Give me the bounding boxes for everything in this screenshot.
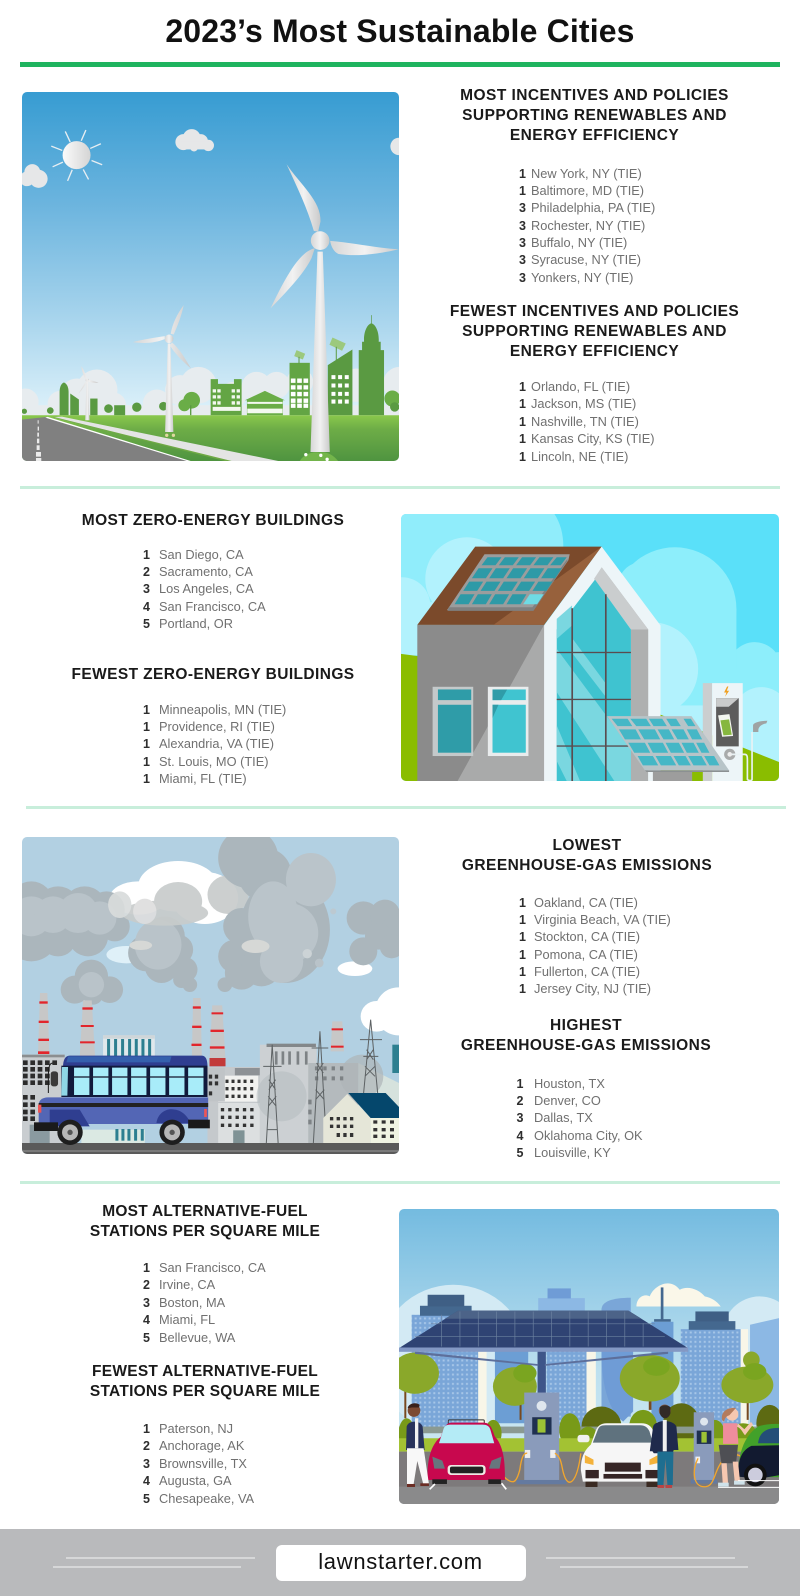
pale hills and clouds	[378, 1283, 796, 1435]
heading: most zero-energy buildings: MOST ZERO-ENERGY BUILDINGS	[82, 512, 344, 529]
heading: most incentives	[460, 87, 729, 144]
panel: renewables incentives: 3	[519, 271, 526, 285]
title: 2023’s Most Sustainable Cities	[165, 13, 635, 49]
smoke: right	[218, 828, 330, 992]
panel: renewables incentives: 1	[519, 415, 526, 429]
heading: fewest alternative-fuel stations: FEWEST ALTERNATIVE-FUEL	[92, 1363, 318, 1380]
panel: alternative-fuel stations: 3	[143, 1457, 150, 1471]
ranked list: fewest stations: Brownsville, TX	[159, 1456, 247, 1471]
heading: highest emissions: GREENHOUSE-GAS EMISSIONS	[461, 1037, 711, 1054]
smoke: far right	[347, 900, 415, 965]
house	[323, 1093, 399, 1145]
panel: zero-energy buildings: 5	[143, 617, 150, 631]
panel: alternative-fuel stations: 4	[143, 1474, 150, 1488]
road	[22, 1143, 399, 1154]
illustration: EV charging station	[399, 1209, 779, 1504]
ranked list: fewest incentives: Kansas City, KS (TIE)	[531, 431, 654, 446]
green electric car	[738, 1424, 779, 1486]
panel: greenhouse-gas emissions: 1	[519, 896, 526, 910]
white car	[578, 1423, 662, 1487]
heading: most incentives: MOST INCENTIVES AND POLICIES	[460, 87, 729, 104]
ranked list: lowest emissions: Oakland, CA (TIE)	[534, 894, 638, 910]
green hills	[401, 653, 779, 780]
panel: alternative-fuel stations: 5	[143, 1331, 150, 1345]
bushes and hedge	[398, 1403, 783, 1452]
panel: greenhouse-gas emissions: 1	[519, 965, 526, 979]
panel: alternative-fuel stations: 2	[143, 1278, 150, 1292]
panel: greenhouse-gas emissions: 1	[519, 948, 526, 962]
ranked list: most stations: Bellevue, WA	[159, 1330, 235, 1345]
solar canopy	[399, 1310, 688, 1393]
ranked list: fewest zero-energy: St. Louis, MO (TIE)	[159, 754, 269, 769]
heading: most incentives: ENERGY EFFICIENCY	[510, 127, 679, 144]
sky clouds	[374, 514, 800, 780]
ranked list: fewest stations: Chesapeake, VA	[159, 1491, 254, 1506]
panel: zero-energy buildings: 1	[143, 720, 150, 734]
white clouds	[106, 861, 422, 1035]
ranked list: fewest zero-energy: Providence, RI (TIE)	[159, 719, 275, 734]
ranked list: highest emissions: Houston, TX	[534, 1076, 605, 1090]
panel: zero-energy buildings: 2	[143, 565, 150, 579]
ranked list: most incentives: Rochester, NY (TIE)	[531, 218, 645, 233]
ranked list: fewest zero-energy: Minneapolis, MN (TIE)	[159, 702, 286, 716]
panel: zero-energy buildings: 1	[143, 755, 150, 769]
ranked list: lowest emissions: Pomona, CA (TIE)	[534, 947, 638, 962]
panel: zero-energy buildings: 1	[143, 702, 150, 716]
footer website pill	[276, 1544, 526, 1580]
person: man middle	[650, 1405, 678, 1488]
ranked list: highest emissions: Louisville, KY	[534, 1145, 611, 1160]
heading: highest emissions: HIGHEST	[550, 1017, 622, 1034]
left factory block	[22, 1055, 65, 1143]
ground solar panel	[607, 716, 729, 780]
panel: renewables incentives: 3	[519, 253, 526, 267]
heading: fewest alternative-fuel stations	[90, 1363, 320, 1400]
panel: zero-energy buildings: 1	[143, 772, 150, 786]
panel: renewables incentives: 3	[519, 201, 526, 215]
ranked list: most incentives: Yonkers, NY (TIE)	[531, 270, 633, 285]
smoke: left	[5, 881, 130, 1005]
ranked list: fewest incentives: Nashville, TN (TIE)	[531, 414, 639, 429]
panel: greenhouse-gas emissions: 4	[517, 1129, 524, 1143]
ranked list: most zero-energy: San Francisco, CA	[159, 599, 266, 614]
heading: lowest emissions: LOWEST	[552, 837, 621, 854]
heading: fewest zero-energy buildings: FEWEST ZERO-ENERGY BUILDINGS	[71, 666, 355, 683]
heading: most incentives: SUPPORTING RENEWABLES AND	[462, 107, 727, 124]
footer decorative lines right	[546, 1557, 748, 1568]
ranked list: fewest incentives: Jackson, MS (TIE)	[531, 396, 636, 411]
ranked list: highest emissions: Denver, CO	[534, 1093, 601, 1108]
panel: alternative-fuel stations: 1	[143, 1422, 150, 1436]
footer band	[0, 1529, 800, 1596]
panel: greenhouse-gas emissions: 1	[519, 930, 526, 944]
illustration: smoggy city and bus	[22, 837, 399, 1154]
panel: renewables incentives: 1	[519, 184, 526, 198]
panel: greenhouse-gas emissions: 3	[517, 1111, 524, 1125]
rooftop solar panel	[447, 554, 570, 610]
smokestacks	[38, 993, 344, 1060]
ranked list: fewest incentives	[519, 379, 654, 464]
heading: fewest incentives: ENERGY EFFICIENCY	[510, 343, 679, 360]
panel: greenhouse-gas emissions: 5	[517, 1146, 524, 1160]
green title rule	[20, 62, 780, 67]
panel: zero-energy buildings: 1	[143, 548, 150, 562]
ranked list: most zero-energy: Los Angeles, CA	[159, 581, 254, 596]
ground	[399, 1452, 779, 1504]
ranked list: most zero-energy	[143, 546, 266, 631]
windows	[433, 686, 528, 756]
panel: renewables incentives: 1	[519, 166, 526, 180]
panel: greenhouse-gas emissions: 1	[519, 913, 526, 927]
ranked list: lowest emissions: Fullerton, CA (TIE)	[534, 964, 640, 979]
ranked list: most incentives	[519, 166, 655, 285]
panel: alternative-fuel stations: 3	[143, 1296, 150, 1310]
bus wheels	[57, 1120, 185, 1145]
panel: alternative-fuel stations: 5	[143, 1492, 150, 1506]
heading: most alternative-fuel stations	[90, 1203, 320, 1240]
trees	[391, 1351, 773, 1420]
teal-striped building	[81, 1035, 155, 1143]
heading: fewest incentives: SUPPORTING RENEWABLES AND	[462, 323, 727, 340]
illustration: solar house with charger	[401, 514, 779, 781]
panel: zero-energy buildings: 4	[143, 600, 150, 614]
panel: alternative-fuel stations: 1	[143, 1261, 150, 1275]
bus	[34, 1056, 210, 1131]
ranked list: lowest emissions: Virginia Beach, VA (TIE)	[534, 912, 671, 927]
main charger	[517, 1393, 567, 1484]
ranked list: most zero-energy: San Diego, CA	[159, 546, 244, 562]
background pale clouds	[12, 367, 416, 421]
ranked list: most incentives: Syracuse, NY (TIE)	[531, 252, 641, 267]
green skyline	[22, 315, 400, 415]
ranked list: lowest emissions: Jersey City, NJ (TIE)	[534, 981, 651, 996]
panel: renewables incentives: 3	[519, 219, 526, 233]
building windows	[213, 375, 349, 413]
ranked list: most stations: Irvine, CA	[159, 1277, 215, 1292]
hazy right buildings	[257, 1044, 399, 1143]
ranked list: most stations: San Francisco, CA	[159, 1260, 266, 1275]
pylons	[263, 1020, 382, 1145]
panel: greenhouse-gas emissions: 2	[517, 1094, 524, 1108]
ranked list: fewest stations: Anchorage, AK	[159, 1438, 244, 1453]
ranked list: highest emissions: Oklahoma City, OK	[534, 1128, 643, 1143]
ranked list: fewest zero-energy: Miami, FL (TIE)	[159, 771, 247, 786]
roof	[417, 546, 602, 624]
heading: most alternative-fuel stations: MOST ALTERNATIVE-FUEL	[102, 1203, 308, 1220]
ranked list: most zero-energy: Portland, OR	[159, 616, 233, 631]
ground and road	[22, 415, 399, 461]
charging station	[703, 683, 767, 780]
ranked list: most incentives: New York, NY (TIE)	[531, 166, 642, 180]
icon: distant wind turbine	[79, 366, 99, 420]
panel: renewables incentives: 1	[519, 432, 526, 446]
heading: fewest incentives: FEWEST INCENTIVES AND POLICIES	[450, 303, 739, 320]
smoke: centre	[128, 916, 197, 992]
ranked list: fewest zero-energy	[143, 702, 286, 786]
heading: most alternative-fuel stations: STATIONS PER SQUARE MILE	[90, 1223, 320, 1240]
panel: alternative-fuel stations	[90, 1203, 779, 1506]
illustration: wind turbines and green city	[22, 92, 399, 461]
footer decorative lines left	[53, 1557, 255, 1568]
panel: renewables incentives	[22, 87, 739, 464]
second charger	[691, 1412, 717, 1484]
house wall	[417, 624, 545, 780]
person: woman charging	[718, 1408, 753, 1487]
heading: fewest alternative-fuel stations: STATIONS PER SQUARE MILE	[90, 1383, 320, 1400]
panel: zero-energy buildings	[71, 512, 779, 786]
heading: highest emissions	[461, 1017, 711, 1054]
panel: greenhouse-gas emissions: 1	[517, 1076, 524, 1090]
panel: alternative-fuel stations: 4	[143, 1313, 150, 1327]
clouds	[20, 129, 408, 188]
ranked list: most stations: Miami, FL	[159, 1312, 215, 1327]
ranked list: most stations	[143, 1260, 266, 1345]
ranked list: fewest stations	[143, 1421, 254, 1506]
person: man left	[406, 1403, 429, 1487]
red car	[428, 1420, 506, 1489]
ranked list: most stations: Boston, MA	[159, 1295, 225, 1310]
ranked list: fewest stations: Augusta, GA	[159, 1473, 232, 1488]
mid city buildings	[207, 1067, 261, 1143]
ranked list: lowest emissions	[519, 894, 671, 996]
gable and glass facade	[544, 546, 661, 780]
heading: lowest emissions: GREENHOUSE-GAS EMISSIONS	[462, 857, 712, 874]
panel: greenhouse-gas emissions	[22, 837, 712, 1160]
panel: greenhouse-gas emissions: 1	[519, 982, 526, 996]
panel: zero-energy buildings: 3	[143, 582, 150, 596]
ranked list: highest emissions: Dallas, TX	[534, 1110, 593, 1125]
ranked list: fewest zero-energy: Alexandria, VA (TIE)	[159, 736, 274, 751]
heading: lowest emissions	[462, 837, 712, 874]
ranked list: highest emissions	[516, 1076, 643, 1160]
ranked list: most incentives: Philadelphia, PA (TIE)	[531, 200, 655, 215]
icon: large wind turbine	[271, 164, 399, 461]
panel: zero-energy buildings: 1	[143, 737, 150, 751]
panel: alternative-fuel stations: 2	[143, 1439, 150, 1453]
charging cables	[503, 1453, 746, 1487]
ranked list: lowest emissions: Stockton, CA (TIE)	[534, 929, 640, 944]
icon: sun	[51, 130, 102, 181]
panel: renewables incentives: 1	[519, 380, 526, 394]
skyline	[412, 1287, 779, 1428]
ranked list: most incentives: Baltimore, MD (TIE)	[531, 183, 644, 198]
heading: fewest incentives	[450, 303, 739, 360]
ranked list: fewest stations: Paterson, NJ	[159, 1421, 233, 1436]
ranked list: most incentives: Buffalo, NY (TIE)	[531, 235, 627, 250]
ranked list: fewest incentives: Orlando, FL (TIE)	[531, 379, 630, 394]
panel: renewables incentives: 1	[519, 397, 526, 411]
footer website pill: lawnstarter.com	[318, 1548, 483, 1574]
panel: renewables incentives: 3	[519, 236, 526, 250]
icon: mid wind turbine	[133, 305, 191, 437]
rooftop solar panels	[294, 337, 346, 363]
ranked list: fewest incentives: Lincoln, NE (TIE)	[531, 449, 628, 464]
panel: renewables incentives: 1	[519, 450, 526, 464]
ranked list: most zero-energy: Sacramento, CA	[159, 564, 253, 579]
